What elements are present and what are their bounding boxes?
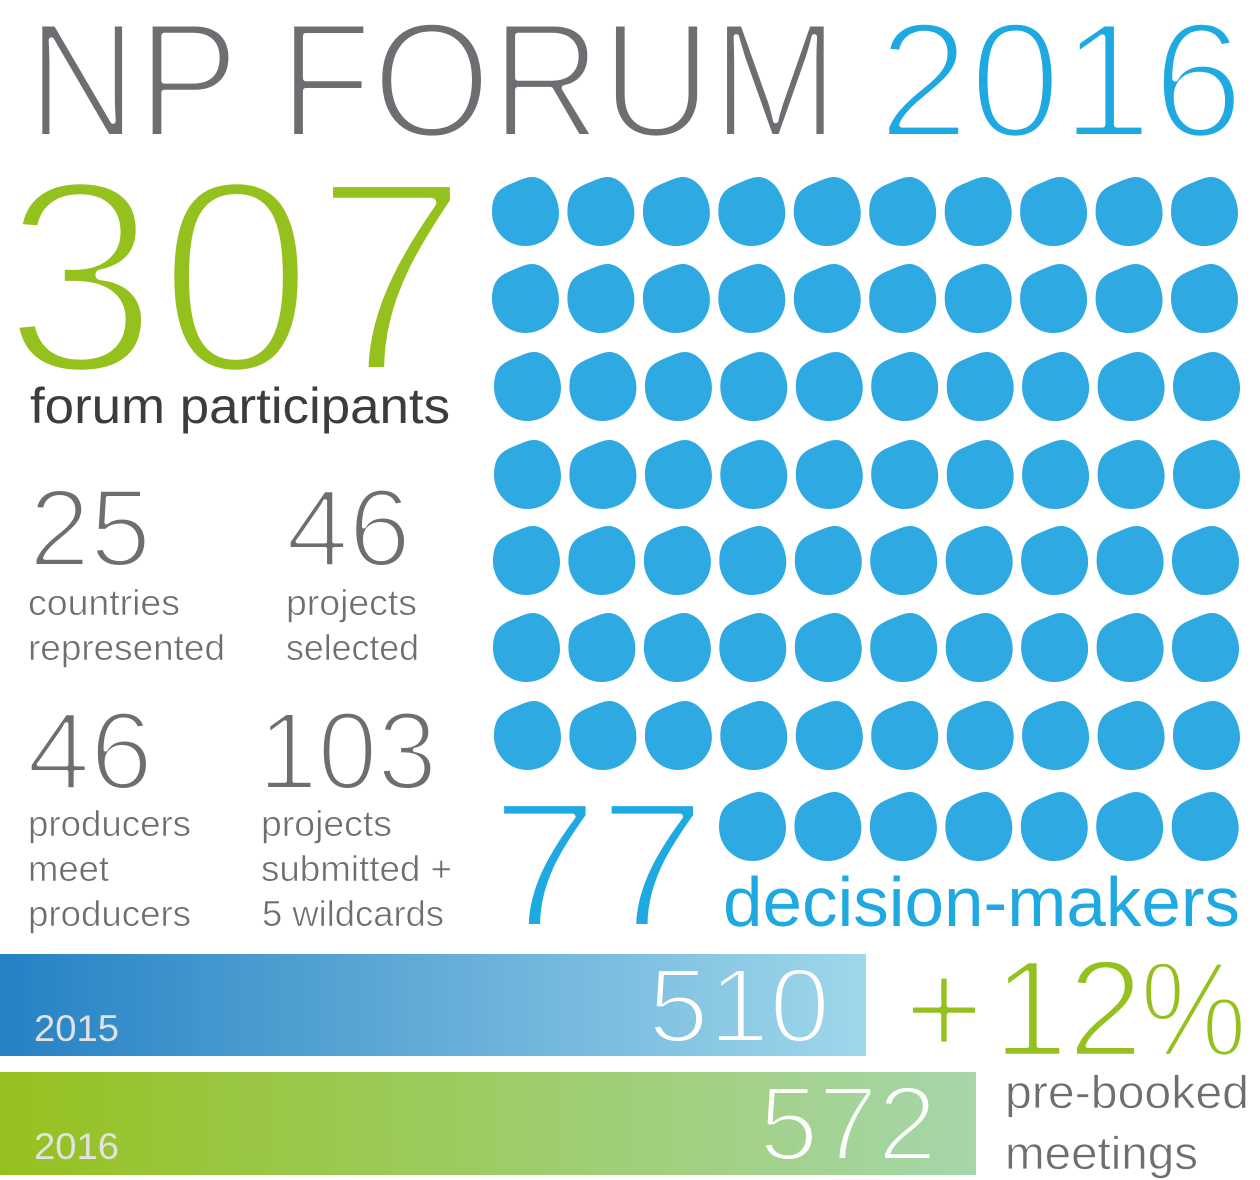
stat: +12% pre-booked meetings: + xyxy=(904,932,984,1086)
pictogram: decision-maker dots xyxy=(492,177,1240,861)
stat: 46 producers meet producers xyxy=(27,690,191,934)
bar: 2016 xyxy=(0,1065,976,1180)
stat: 77 decision-makers: 77 xyxy=(491,765,706,966)
stat: 46 projects selected: projects xyxy=(286,582,417,623)
stat: 25 countries represented: countries xyxy=(28,582,180,623)
stat: 46 projects selected: 46 xyxy=(286,467,411,590)
headline stat: 307 forum participants: 307 xyxy=(3,123,469,431)
stat: 103 projects submitted + 5 wildcards: 103 xyxy=(258,690,437,813)
stat: 103 projects submitted + 5 wildcards: 5 wildcards xyxy=(262,893,444,934)
stat: 103 projects submitted + 5 wildcards xyxy=(258,690,452,934)
stat: +12% pre-booked meetings: meetings xyxy=(1005,1127,1198,1179)
stat: 25 countries represented: 25 xyxy=(29,467,151,590)
bar: 2015: 510 xyxy=(648,947,830,1065)
stat: 25 countries represented xyxy=(28,467,225,668)
stat: 46 producers meet producers: producers xyxy=(28,893,191,934)
stat: +12% pre-booked meetings: 12 xyxy=(993,932,1143,1086)
stat: 46 producers meet producers: meet xyxy=(28,848,109,889)
bar: 2016: 572 xyxy=(759,1065,937,1180)
stat: 46 producers meet producers: 46 xyxy=(27,690,153,813)
stat: 46 projects selected: selected xyxy=(286,627,419,668)
stat: 25 countries represented: represented xyxy=(28,627,225,668)
stat: 77 decision-makers: decision-makers xyxy=(723,863,1240,941)
stat: +12% pre-booked meetings xyxy=(904,932,1249,1179)
stat: 46 projects selected xyxy=(286,467,419,668)
bar: 2016: 2016 xyxy=(34,1126,119,1167)
stat: 46 producers meet producers: producers xyxy=(28,803,191,844)
stat: +12% pre-booked meetings: pre-booked xyxy=(1005,1066,1249,1118)
bar: 2015: 2015 xyxy=(34,1008,119,1049)
stat: 77 decision-makers xyxy=(491,765,1240,966)
headline stat: 307 forum participants: forum participants xyxy=(30,378,450,434)
stat: +12% pre-booked meetings: % xyxy=(1140,933,1247,1085)
stat: 103 projects submitted + 5 wildcards: submitted + xyxy=(261,848,452,889)
bar: 2015 xyxy=(0,947,866,1065)
stat: 103 projects submitted + 5 wildcards: projects xyxy=(261,803,392,844)
